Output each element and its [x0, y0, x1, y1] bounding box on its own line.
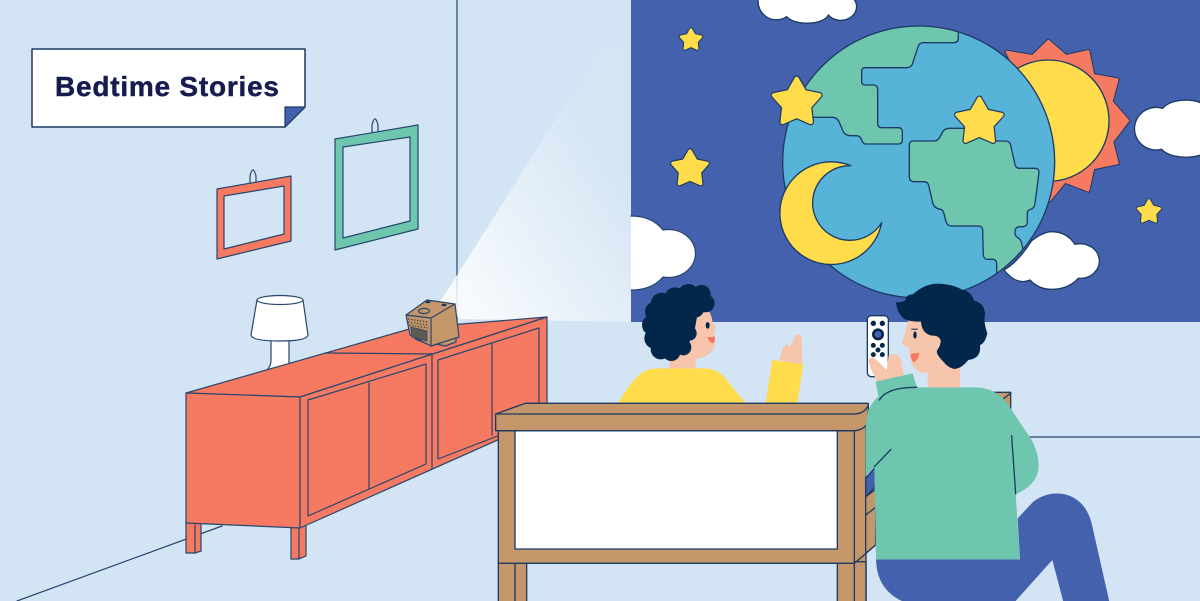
door panel right — [438, 328, 539, 459]
adult eye — [913, 331, 917, 339]
sideboard front face — [300, 317, 547, 528]
projected night sky panel — [631, 0, 1200, 322]
adult trousers — [876, 494, 1109, 601]
child torso — [618, 368, 746, 403]
cloud: left — [631, 216, 695, 290]
lamp shade — [251, 300, 308, 341]
earth outline — [783, 26, 1055, 298]
sofa frame — [498, 431, 854, 563]
child hair — [642, 284, 715, 361]
floor line right — [1030, 436, 1200, 438]
sofa side slats — [854, 489, 876, 563]
projector light beam — [440, 50, 631, 322]
remote control — [867, 316, 888, 377]
child eye — [706, 322, 710, 329]
child hand — [779, 334, 802, 365]
child — [618, 284, 803, 403]
projector device — [406, 300, 459, 346]
cloud: bottom — [1004, 232, 1099, 289]
sofa right leg — [837, 562, 866, 601]
child mouth — [707, 337, 715, 343]
earth land masses — [806, 26, 1040, 273]
sofa left leg — [498, 562, 527, 601]
sofa — [496, 403, 868, 601]
front leg — [291, 525, 306, 559]
back left leg — [186, 520, 201, 553]
crescent moon — [780, 162, 882, 265]
earth ocean — [783, 26, 1055, 298]
adult neck — [928, 363, 960, 390]
title banner — [32, 49, 305, 127]
adult sleeve cuff — [876, 373, 917, 402]
lamp — [251, 296, 308, 370]
picture frame: coral — [217, 170, 291, 259]
earth, sun and moon group — [758, 0, 1200, 298]
title text: Bedtime Stories — [55, 71, 279, 102]
cloud: right — [1135, 100, 1200, 157]
adult hair — [896, 284, 987, 369]
star: far right — [1138, 200, 1160, 221]
star: mid left — [673, 151, 707, 184]
star: on earth left — [774, 79, 819, 122]
banner corner fold — [285, 107, 305, 127]
blue seat behind — [866, 467, 876, 497]
door panel left — [308, 364, 426, 516]
sun disc — [988, 60, 1109, 181]
adult hand — [868, 354, 904, 383]
sofa top rail — [496, 403, 868, 431]
adult face — [902, 313, 950, 373]
adult — [854, 284, 1109, 601]
child face — [688, 310, 716, 359]
cloud: top — [758, 0, 857, 23]
sideboard top — [186, 317, 547, 397]
adult sweater — [866, 387, 1039, 559]
sofa far side rail — [854, 425, 866, 601]
star: on earth centre — [957, 99, 1001, 141]
floor line left — [17, 526, 222, 601]
child sleeve — [766, 360, 803, 403]
sideboard end face — [186, 393, 300, 528]
adult mouth — [911, 353, 919, 362]
wall corner line — [456, 0, 458, 320]
sofa white cushion — [515, 431, 837, 549]
sun rays — [1007, 41, 1128, 200]
sofa rear corner — [992, 392, 1011, 412]
picture frame: green — [335, 119, 418, 250]
lamp base — [267, 338, 289, 370]
star: top left — [681, 30, 701, 49]
sideboard — [186, 317, 547, 559]
child neck — [669, 350, 696, 372]
